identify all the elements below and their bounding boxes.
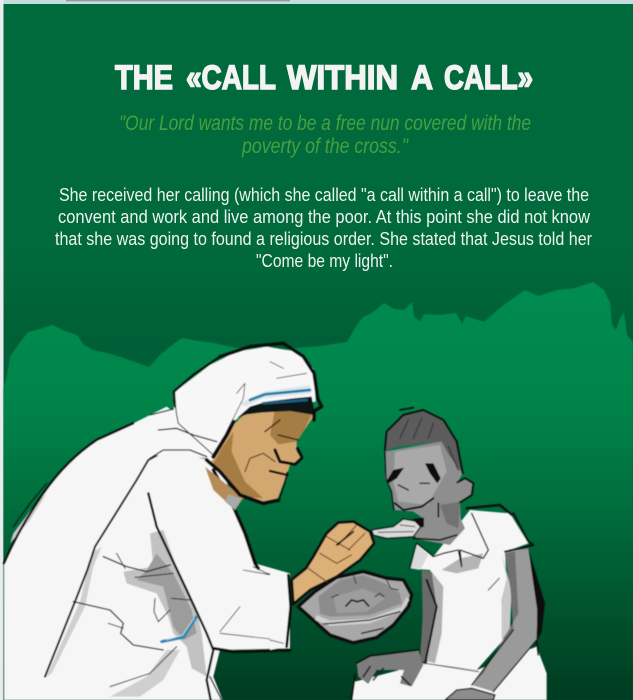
child head bbox=[372, 408, 473, 545]
nun sleeve, arm and hand bbox=[270, 522, 374, 650]
green hills silhouette bbox=[4, 282, 633, 700]
child collar bbox=[410, 513, 488, 568]
veil band bbox=[240, 385, 312, 407]
body text: "Come be my light". bbox=[256, 250, 393, 271]
title: WITHIN bbox=[287, 59, 398, 97]
bowl of food bbox=[298, 572, 412, 643]
nun body and robe bbox=[4, 407, 290, 700]
nun face bbox=[210, 405, 314, 504]
left margin strip bbox=[0, 0, 4, 700]
spoon bbox=[372, 519, 421, 538]
title: CALL» bbox=[444, 59, 533, 97]
child lower garment bbox=[352, 647, 547, 700]
top browser strip bbox=[0, 0, 633, 4]
title: «CALL bbox=[186, 59, 276, 97]
illustration: nun feeding a child bbox=[4, 343, 547, 700]
quote: poverty of the cross." bbox=[241, 135, 409, 158]
title bbox=[115, 59, 533, 97]
nun head and veil bbox=[150, 343, 322, 510]
title: THE bbox=[115, 59, 173, 97]
quote: "Our Lord wants me to be a free nun covered with the bbox=[119, 112, 531, 135]
child right arm bbox=[472, 548, 537, 692]
title: A bbox=[411, 59, 433, 97]
quote bbox=[119, 112, 531, 158]
belt blue stripe bbox=[162, 617, 197, 642]
child lower hand bbox=[445, 688, 495, 700]
child body and shirt bbox=[352, 505, 547, 700]
child left arm and hand bbox=[357, 650, 423, 687]
body text bbox=[55, 184, 592, 271]
